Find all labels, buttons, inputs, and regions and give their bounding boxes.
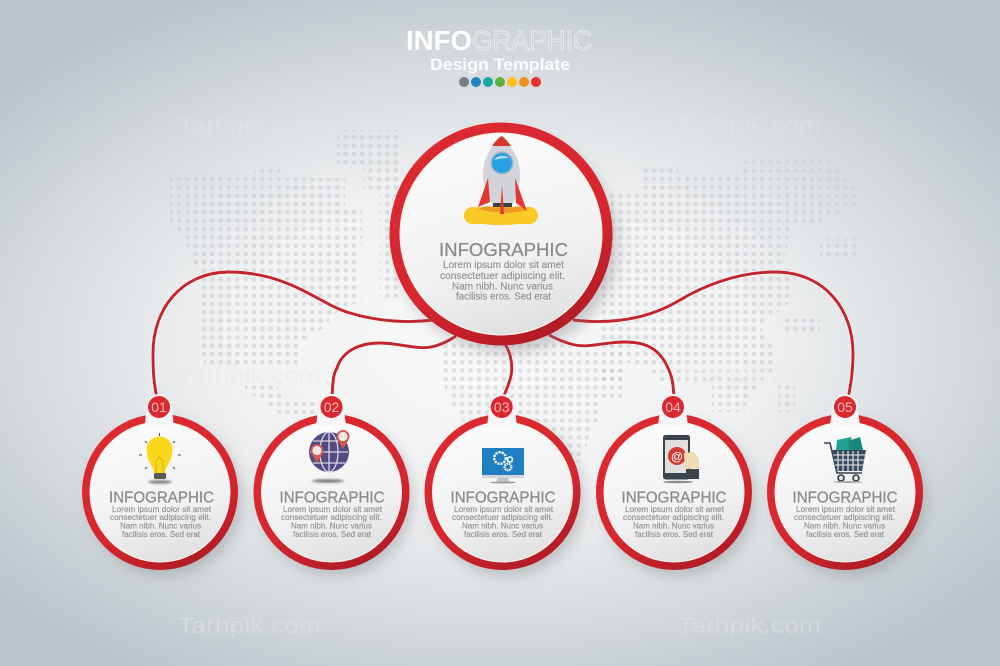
main body text: Nam nibh. Nunc varius [452, 280, 553, 292]
main body text: facilisis eros. Sed erat [456, 290, 551, 302]
step body text: Lorem ipsum dolor sit amet [283, 504, 383, 514]
subtitle: Design Template [430, 56, 570, 74]
step body text [623, 504, 725, 539]
watermarks: Tarhpik.com [678, 363, 821, 388]
icon: phone with hand [663, 435, 699, 483]
icon: monitor with gears [482, 448, 524, 484]
icon: globe with pins [309, 430, 350, 483]
connector curves [153, 272, 853, 398]
colour dots [459, 77, 541, 87]
step body text: Nam nibh. Nunc varius [462, 520, 543, 530]
step body text: facilisis eros. Sed erat [464, 529, 543, 539]
panel: step 05 [767, 394, 926, 576]
watermarks: Tarhpik.com [678, 113, 821, 138]
watermarks: Tarhpik.com [178, 613, 321, 638]
step heading: INFOGRAPHIC [280, 490, 384, 506]
step body text: facilisis eros. Sed erat [635, 529, 714, 539]
icon: shopping cart [824, 437, 866, 483]
step body text [110, 504, 212, 539]
main body text: consectetuer adipiscing elit. [440, 270, 565, 282]
badge 03: 03 [494, 399, 510, 415]
main body text: Lorem ipsum dolor sit amet [443, 259, 564, 271]
watermarks: Tarhpik.com [678, 613, 821, 638]
badge 01 [146, 394, 172, 420]
badge 03 [489, 394, 515, 420]
panel: step 01 [82, 394, 242, 576]
step body text: Lorem ipsum dolor sit amet [796, 504, 896, 514]
badge 02 [318, 394, 344, 420]
panel: step 04 [596, 394, 756, 576]
badge 04 [660, 394, 686, 420]
badge 05 [832, 394, 858, 420]
badge 02: 02 [324, 399, 339, 415]
step body text: consectetuer adipiscing elit. [794, 512, 895, 522]
badge 05: 05 [837, 399, 853, 415]
watermarks: Tarhpik.com [178, 113, 321, 138]
badge 04: 04 [665, 399, 681, 415]
main body text [440, 259, 565, 302]
panel: main circle [390, 122, 617, 353]
step heading: INFOGRAPHIC [450, 490, 556, 506]
step body text: Lorem ipsum dolor sit amet [454, 504, 554, 514]
step body text: Nam nibh. Nunc varius [633, 520, 714, 530]
badge 01: 01 [151, 399, 167, 415]
watermarks [178, 113, 821, 638]
watermarks: Tarhpik.com [178, 363, 321, 388]
icon: rocket [464, 136, 538, 225]
step body text: consectetuer adipiscing elit. [452, 512, 553, 522]
main heading: INFOGRAPHIC [439, 240, 568, 260]
step body text: consectetuer adipiscing elit. [281, 512, 382, 522]
dotted world map [170, 130, 858, 462]
title: INFOGRAPHIC: INFO [406, 25, 472, 56]
step body text: facilisis eros. Sed erat [122, 529, 201, 539]
icon: light bulb [139, 433, 181, 484]
step body text [281, 504, 383, 539]
step body text: Nam nibh. Nunc varius [291, 520, 372, 530]
step body text: Lorem ipsum dolor sit amet [112, 504, 212, 514]
panel: step 02 [254, 394, 413, 576]
title block [406, 25, 592, 87]
step heading: INFOGRAPHIC [622, 490, 726, 506]
panel: step 03 [424, 394, 584, 576]
step heading: INFOGRAPHIC [792, 490, 898, 506]
title: INFOGRAPHIC: GRAPHIC [472, 25, 592, 56]
step body text: Lorem ipsum dolor sit amet [625, 504, 725, 514]
step body text: consectetuer adipiscing elit. [623, 512, 724, 522]
step heading: INFOGRAPHIC [109, 490, 214, 506]
step body text: Nam nibh. Nunc varius [804, 520, 885, 530]
step body text [452, 504, 554, 539]
step body text: facilisis eros. Sed erat [293, 529, 372, 539]
step body text: facilisis eros. Sed erat [806, 529, 885, 539]
title: INFOGRAPHIC [406, 25, 592, 56]
icon: phone with hand: @ [671, 450, 683, 464]
step body text [794, 504, 896, 539]
step body text: consectetuer adipiscing elit. [110, 512, 211, 522]
step body text: Nam nibh. Nunc varius [120, 520, 201, 530]
